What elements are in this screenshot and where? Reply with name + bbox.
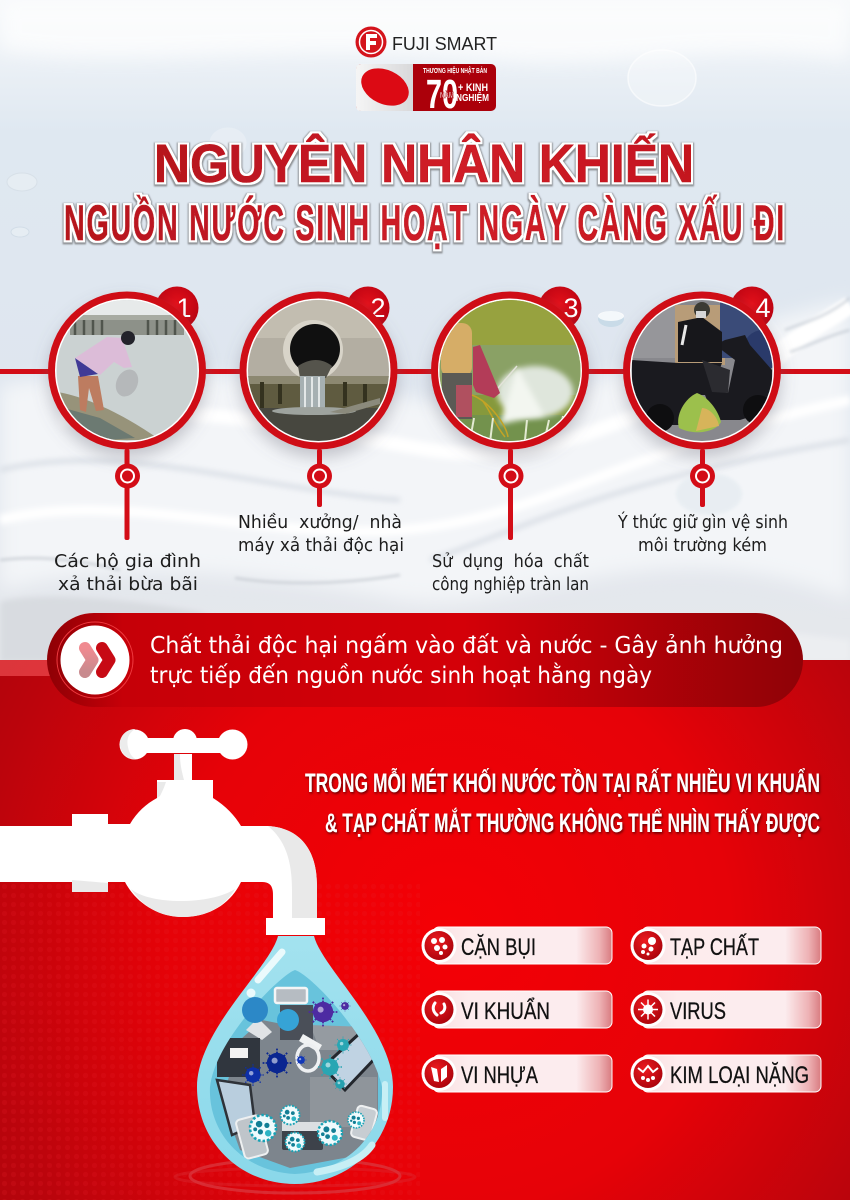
photo: pesticide spraying xyxy=(438,298,583,445)
brand logo xyxy=(356,26,497,58)
pill: virus xyxy=(630,991,821,1028)
badge: 70 years of experience: NĂM xyxy=(440,91,454,100)
badge: 70 years of experience xyxy=(355,61,496,117)
caption 3 xyxy=(432,551,589,595)
connector stems and nodes xyxy=(115,449,715,540)
number badge 3 xyxy=(538,286,582,330)
photo: factory discharge pipe xyxy=(246,298,391,443)
background: light water section xyxy=(0,0,850,662)
photo: littering from a scooter xyxy=(632,300,772,441)
step 4 xyxy=(623,286,783,450)
caption 3: Sử dụng hóa chất xyxy=(432,551,589,572)
photo: person dumping waste xyxy=(55,298,200,443)
pill: vi khuẩn: VI KHUẨN xyxy=(461,997,550,1025)
title xyxy=(64,133,786,251)
step 3 xyxy=(431,286,589,450)
caption 2: máy xả thải độc hại xyxy=(238,535,404,556)
callout text xyxy=(150,631,783,689)
pill: kim loại nặng xyxy=(630,1055,821,1092)
callout text: trực tiếp đến nguồn nước sinh hoạt hằng ngày xyxy=(150,661,652,689)
pill: virus: VIRUS xyxy=(670,998,726,1025)
badge: 70 years of experience: THƯƠNG HIỆU NHẬT BẢN xyxy=(423,66,487,75)
number badge 1 xyxy=(156,286,198,330)
faucet xyxy=(0,729,325,935)
icon: microplastic xyxy=(422,1056,456,1091)
icon: impurities xyxy=(630,928,666,963)
badge: 70 years of experience: 70 xyxy=(426,71,458,117)
caption 4: Ý thức giữ gìn vệ sinh xyxy=(617,511,788,533)
background: red section xyxy=(0,660,850,1200)
badge: 70 years of experience: NGHIỆM xyxy=(456,91,489,104)
caption 1 xyxy=(54,551,201,595)
caption 3: công nghiệp tràn lan xyxy=(432,574,589,595)
node 4 xyxy=(690,449,715,507)
pill: vi khuẩn xyxy=(422,991,612,1028)
viruses xyxy=(242,997,364,1152)
caption 4: môi trường kém xyxy=(638,535,767,556)
logo mark xyxy=(356,26,386,58)
number badge 4 xyxy=(730,286,774,330)
number badge 3: 3 xyxy=(563,293,579,323)
badge: 70 years of experience: + KINH xyxy=(458,82,488,94)
node 3 xyxy=(498,449,524,540)
title: NGUYÊN NHÂN KHIẾN xyxy=(154,133,694,194)
timeline connector xyxy=(0,369,850,374)
chevron icon xyxy=(57,622,133,698)
step 2 xyxy=(240,286,398,450)
heading: invisible contaminants xyxy=(305,766,820,838)
icon: heavy metals xyxy=(630,1056,666,1091)
pill: cặn bụi: CẶN BỤI xyxy=(461,934,536,961)
caption 1: Các hộ gia đình xyxy=(54,551,201,572)
icon: dust xyxy=(422,928,456,963)
debris pile xyxy=(217,988,380,1168)
node 2 xyxy=(307,449,332,507)
water drop with contaminants xyxy=(197,936,393,1184)
pill: tạp chất: TẠP CHẤT xyxy=(670,933,759,961)
callout banner xyxy=(47,613,803,707)
node 1 xyxy=(115,449,140,540)
pill: tạp chất xyxy=(630,927,821,964)
number badge 2: 2 xyxy=(370,293,386,323)
callout text: Chất thải độc hại ngấm vào đất và nước - Gây ảnh hưởng xyxy=(150,631,783,659)
pill: cặn bụi xyxy=(422,927,612,964)
number badge 4: 4 xyxy=(755,293,771,323)
caption 2 xyxy=(238,512,404,556)
caption 1: xả thải bừa bãi xyxy=(58,574,198,595)
step 1 xyxy=(48,286,206,450)
number badge 2 xyxy=(346,286,390,330)
caption 2: Nhiều xưởng/ nhà xyxy=(238,512,402,533)
pill: vi nhựa: VI NHỰA xyxy=(461,1062,538,1089)
icon: bacteria xyxy=(422,992,456,1027)
caption 4 xyxy=(617,511,788,556)
logo text: FUJI SMART xyxy=(392,33,497,54)
icon: virus xyxy=(630,992,666,1027)
pill: kim loại nặng: KIM LOẠI NẶNG xyxy=(670,1062,809,1089)
pill: vi nhựa xyxy=(422,1055,612,1092)
number badge 1: 1 xyxy=(176,293,192,323)
